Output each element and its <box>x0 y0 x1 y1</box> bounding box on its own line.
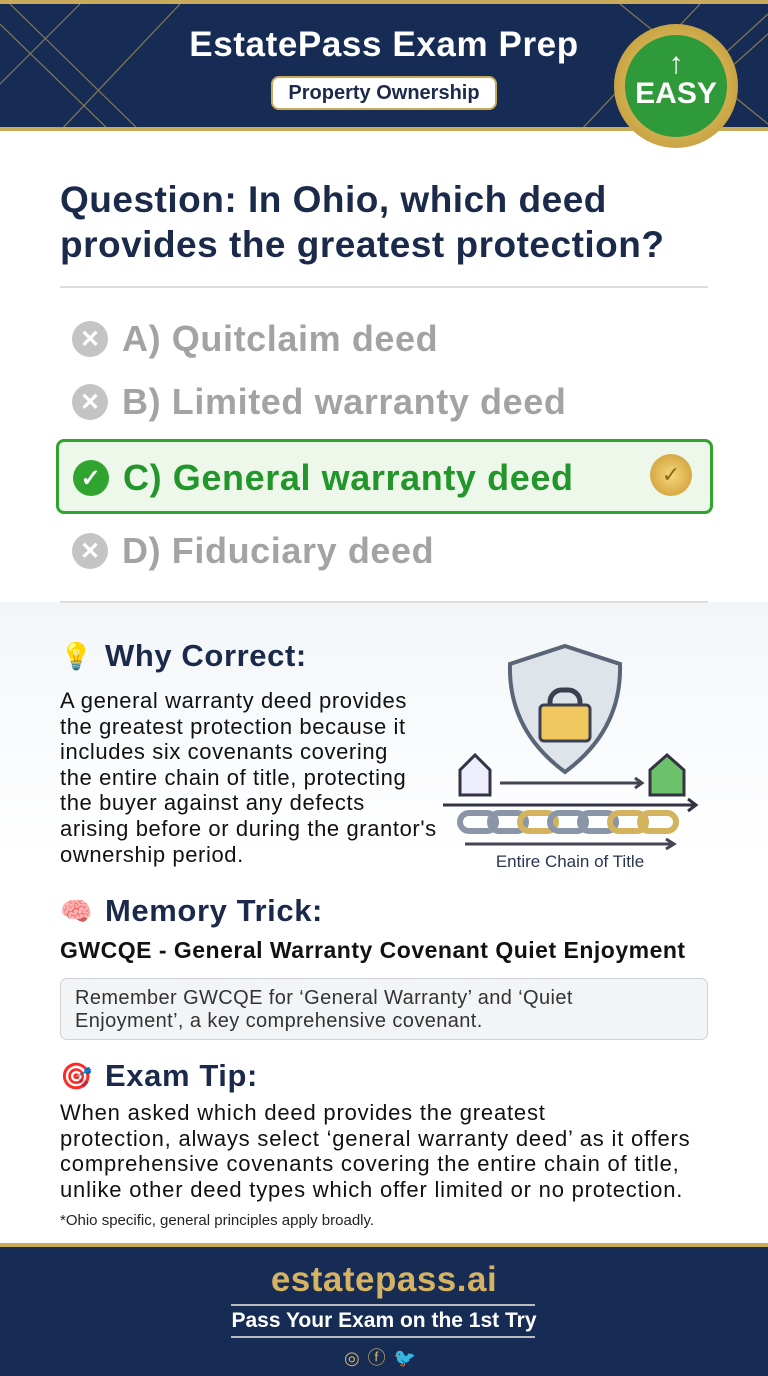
option A: ✕ <box>80 326 100 352</box>
badge: easy: EASY <box>635 77 717 110</box>
illustration: shield chain: Entire Chain of Title <box>496 852 644 871</box>
social icons: ◎ⓕ🐦 <box>344 1348 424 1368</box>
text: tip <box>60 1100 690 1202</box>
option B: B) Limited warranty deed <box>122 381 566 422</box>
text: explanation <box>60 688 437 867</box>
footer <box>0 1243 768 1376</box>
option A: A) Quitclaim deed <box>122 318 438 359</box>
icon: medal <box>650 454 692 496</box>
option C correct: C) General warranty deed <box>123 457 574 498</box>
question <box>60 179 664 265</box>
text: explanation: the greatest protection because it <box>60 714 406 739</box>
heading: exam tip: 🎯 <box>60 1060 93 1090</box>
mnemonic: GWCQE - General Warranty Covenant Quiet Enjoyment <box>60 937 686 963</box>
option D: ✕ <box>80 538 100 564</box>
option C correct <box>56 439 713 514</box>
title: EstatePass Exam Prep <box>189 25 579 64</box>
text: tip: protection, always select ‘general warranty deed’ as it offers <box>60 1126 690 1151</box>
text: tip: When asked which deed provides the greatest <box>60 1100 546 1125</box>
text: tip: comprehensive covenants covering the entire chain of title, <box>60 1151 680 1176</box>
question: provides the greatest protection? <box>60 224 664 265</box>
heading: why correct: 💡 <box>60 640 93 670</box>
heading: why correct: Why Correct: <box>105 638 307 673</box>
memory box: Enjoyment’, a key comprehensive covenant. <box>75 1010 483 1032</box>
text: explanation: the buyer against any defects <box>60 790 365 815</box>
memory box: Remember GWCQE for ‘General Warranty’ and ‘Quiet <box>75 987 573 1009</box>
heading: memory trick: 🧠 <box>60 896 93 926</box>
text: explanation: the entire chain of title, protecting <box>60 765 406 790</box>
text: explanation: ownership period. <box>60 842 244 867</box>
heading: exam tip: Exam Tip: <box>105 1058 258 1093</box>
tagline: Pass Your Exam on the 1st Try <box>231 1309 536 1332</box>
option D: D) Fiduciary deed <box>122 530 434 571</box>
text: explanation: includes six covenants covering <box>60 739 388 764</box>
badge: easy <box>614 24 738 148</box>
text: explanation: A general warranty deed provides <box>60 688 407 713</box>
option B: ✕ <box>80 388 100 416</box>
text: tip: unlike other deed types which offer limited or no protection. <box>60 1177 683 1202</box>
badge: easy: ↑ <box>668 47 684 80</box>
heading: memory trick: Memory Trick: <box>105 893 323 928</box>
footnote: *Ohio specific, general principles apply broadly. <box>60 1212 374 1229</box>
question: Question: In Ohio, which deed <box>60 179 607 220</box>
icon: medal: ✓ <box>662 462 680 487</box>
option C correct: ✓ <box>81 464 101 492</box>
header <box>0 0 768 131</box>
brand: estatepass.ai <box>271 1260 497 1299</box>
pill: category <box>271 76 497 110</box>
illustration: shield chain <box>443 644 698 871</box>
text: explanation: arising before or during the grantor's <box>60 816 437 841</box>
memory box <box>60 978 708 1040</box>
pill: category: Property Ownership <box>288 82 480 104</box>
